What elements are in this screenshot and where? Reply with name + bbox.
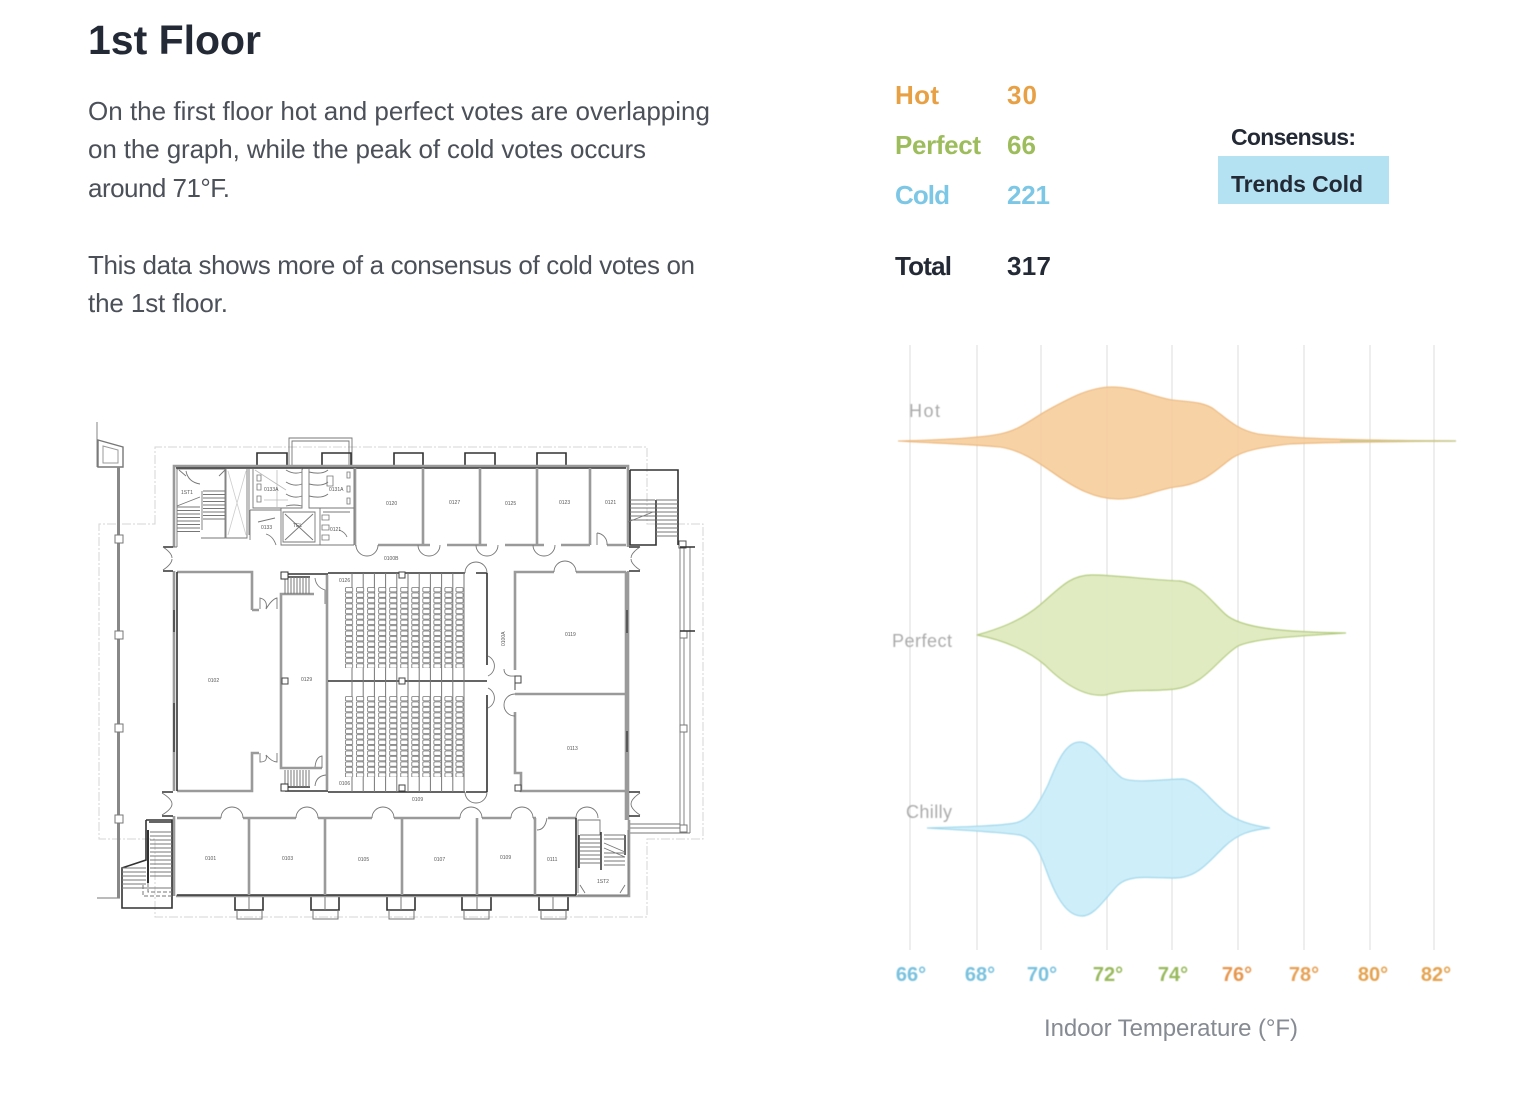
hot tail highlight — [1340, 440, 1456, 442]
south rooms: 0109 — [500, 855, 511, 861]
north core: stair, restrooms, elevator: 0121 — [330, 527, 341, 533]
text block: description: around 71°F. — [88, 173, 230, 203]
consensus callout: Consensus: — [1231, 124, 1356, 150]
axis tick labels — [896, 964, 1451, 986]
axis tick labels: 72° — [1093, 964, 1123, 986]
axis tick labels: 76° — [1222, 964, 1252, 986]
floor plan — [97, 422, 703, 919]
consensus callout: Trends Cold — [1231, 171, 1363, 197]
room 0102 — [174, 572, 277, 791]
north core: stair, restrooms, elevator: 0133 — [261, 525, 272, 531]
cold votes: 221 — [1007, 180, 1050, 210]
hot votes: 30 — [1007, 80, 1037, 110]
row labels: Perfect — [892, 631, 952, 651]
auditorium seating: 0100A — [501, 631, 507, 646]
text block: description — [88, 96, 710, 318]
room 0102: 0102 — [208, 678, 219, 684]
row labels — [892, 401, 952, 822]
top rooms: 0120 — [386, 501, 397, 507]
perfect votes — [895, 130, 1036, 160]
vote counts — [895, 80, 1051, 281]
cold votes — [895, 180, 1050, 210]
site dashed outline — [99, 447, 703, 917]
north core: stair, restrooms, elevator: 0133A — [264, 487, 279, 493]
text block: description: the 1st floor. — [88, 288, 228, 318]
top rooms — [355, 468, 626, 562]
exterior walls — [162, 466, 640, 896]
violin chart — [892, 345, 1456, 1042]
perfect votes: 66 — [1007, 130, 1036, 160]
axis tick labels: 70° — [1027, 964, 1057, 986]
grid lines — [910, 345, 1434, 950]
total votes — [895, 251, 1051, 281]
axis tick labels: 66° — [896, 964, 926, 986]
top rooms: 0123 — [559, 500, 570, 506]
axis title: Indoor Temperature (°F) — [1044, 1015, 1298, 1042]
east colonnade — [630, 541, 695, 833]
text block: description: This data shows more of a consensus of cold votes on — [88, 250, 695, 280]
southeast stair — [578, 820, 628, 895]
south rooms — [177, 807, 598, 895]
southeast stair: 1ST2 — [597, 879, 609, 885]
top rooms: 0100B — [384, 556, 399, 562]
hot votes — [895, 80, 1037, 110]
cold votes: Cold — [895, 180, 950, 210]
text block: description: On the first floor hot and perfect votes are overlapping — [88, 96, 710, 126]
auditorium seating — [328, 562, 507, 803]
violin: chilly — [927, 742, 1270, 916]
axis tick labels: 82° — [1421, 964, 1451, 986]
consensus callout — [1218, 124, 1389, 204]
total votes: Total — [895, 251, 952, 281]
row labels: Hot — [909, 401, 940, 421]
text block: description: on the graph, while the peak of cold votes occurs — [88, 134, 646, 164]
room 0129 and stair halls: 0106 — [339, 781, 350, 787]
west colonnade — [97, 422, 123, 898]
northeast stair — [628, 470, 678, 545]
north core: stair, restrooms, elevator — [173, 469, 354, 547]
south rooms: 0111 — [547, 857, 558, 863]
southwest stair — [122, 820, 172, 908]
north core: stair, restrooms, elevator: 0131A — [329, 487, 344, 493]
north core: stair, restrooms, elevator: 1ST1 — [181, 490, 193, 496]
south rooms: 0101 — [205, 856, 216, 862]
east rooms 0119 and 0113: 0113 — [567, 746, 578, 752]
axis tick labels: 78° — [1289, 964, 1319, 986]
north core: stair, restrooms, elevator: TEL — [293, 523, 302, 529]
axis tick labels: 74° — [1158, 964, 1188, 986]
room 0129 and stair halls: 0126 — [339, 578, 350, 584]
top rooms: 0127 — [449, 500, 460, 506]
south rooms: 0105 — [358, 857, 369, 863]
south rooms: 0107 — [434, 857, 445, 863]
south rooms: 0103 — [282, 856, 293, 862]
violin: perfect — [977, 575, 1346, 695]
top rooms: 0125 — [505, 501, 516, 507]
violin: hot — [898, 387, 1456, 499]
row labels: Chilly — [906, 802, 952, 822]
perfect votes: Perfect — [895, 130, 981, 160]
top rooms: 0121 — [605, 500, 616, 506]
room 0129 and stair halls: 0109 — [412, 797, 423, 803]
axis tick labels: 68° — [965, 964, 995, 986]
axis tick labels: 80° — [1358, 964, 1388, 986]
east rooms 0119 and 0113: 0119 — [565, 632, 576, 638]
east rooms 0119 and 0113 — [504, 561, 627, 820]
room 0129 and stair halls — [281, 572, 423, 803]
title: 1st Floor — [88, 17, 261, 63]
total votes: 317 — [1007, 251, 1051, 281]
room 0129 and stair halls: 0129 — [301, 677, 312, 683]
exterior bays — [235, 438, 568, 919]
hot votes: Hot — [895, 80, 939, 110]
